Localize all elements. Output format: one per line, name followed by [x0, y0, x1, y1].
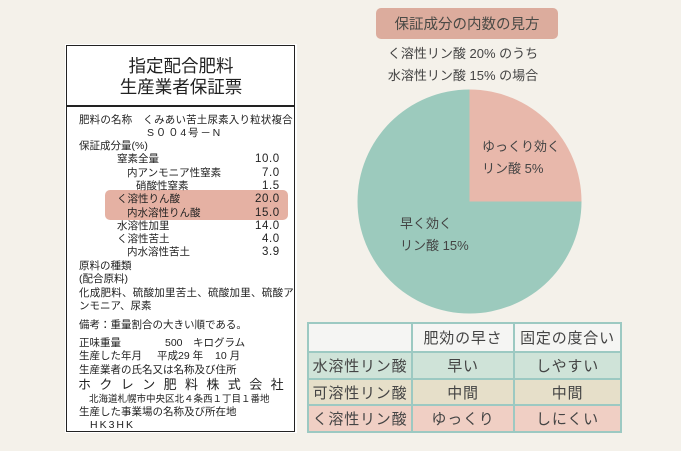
- pie label: fast-acting: リン酸 15%: [400, 238, 469, 253]
- certificate heading: 指定配合肥料: [128, 56, 234, 76]
- certificate text: 窒素全量: [117, 152, 159, 164]
- certificate text: 生産した年月: [79, 350, 142, 362]
- certificate text: 15.0: [255, 206, 280, 218]
- subtitle text: 水溶性リン酸 15% の場合: [388, 68, 538, 82]
- certificate text: 14.0: [255, 220, 280, 232]
- certificate text: [78, 114, 294, 430]
- table row: citric soluble: ゆっくり: [431, 411, 495, 428]
- table header row: [309, 324, 620, 351]
- table header row: 肥効の早さ: [423, 330, 502, 347]
- certificate text: (配合原料): [79, 272, 128, 284]
- table row: available: 中間: [447, 384, 479, 402]
- certificate text: 備考：重量割合の大きい順である。: [79, 318, 247, 330]
- table row: water soluble: しやすい: [536, 358, 599, 375]
- table row: citric soluble: しにくい: [536, 411, 599, 428]
- certificate frame: [66, 45, 295, 432]
- table row: water soluble: 水溶性リン酸: [313, 358, 407, 375]
- table row: available: [309, 380, 620, 404]
- certificate text: 7.0: [262, 166, 280, 178]
- certificate heading: 生産業者保証票: [120, 77, 242, 97]
- certificate heading: [120, 56, 242, 97]
- table row: available: 中間: [552, 384, 583, 402]
- certificate text: 水溶性加里: [117, 220, 170, 232]
- certificate text: 肥料の名称 くみあい苦土尿素入り粒状複合: [79, 114, 293, 126]
- certificate text: ホクレン肥料株式会社: [78, 376, 292, 392]
- certificate text: 内水溶性苦土: [127, 246, 190, 258]
- slice: fast-acting phosphate 15%: [358, 89, 582, 313]
- certificate text: く溶性苦土: [117, 232, 170, 244]
- certificate text: 原料の種類: [79, 260, 132, 272]
- pie label: fast-acting: 早く効く: [400, 216, 452, 231]
- pie label: slow-acting: リン酸 5%: [482, 161, 543, 176]
- table row: citric soluble: [309, 406, 620, 431]
- slice: slow-acting phosphate 5%: [470, 90, 582, 202]
- heading pill: [376, 8, 558, 39]
- certificate text: 10.0: [255, 152, 280, 164]
- certificate text: S００4号－N: [147, 126, 222, 138]
- certificate text: HK3HK: [90, 418, 135, 430]
- certificate text: 正味重量: [79, 336, 121, 348]
- subtitle text: [388, 46, 538, 82]
- table row: available: 可溶性リン酸: [313, 384, 407, 402]
- table row: water soluble: 早い: [447, 358, 479, 375]
- highlight: citric soluble phosphate rows: [105, 190, 288, 220]
- certificate text: 20.0: [255, 192, 280, 204]
- pie label: slow-acting: [482, 139, 560, 176]
- certificate text: 生産した事業場の名称及び所在地: [79, 406, 236, 418]
- certificate text: 3.9: [262, 246, 280, 258]
- heading pill: 保証成分の内数の見方: [394, 17, 540, 33]
- certificate text: 生産業者の氏名又は名称及び住所: [79, 364, 236, 376]
- certificate text: 保証成分量(%): [79, 140, 148, 152]
- comparison table: [307, 322, 622, 433]
- certificate text: キログラム: [193, 336, 245, 348]
- certificate text: 硝酸性窒素: [136, 180, 188, 192]
- certificate text: 内水溶性りん酸: [127, 206, 200, 218]
- certificate text: 500: [165, 336, 183, 348]
- certificate text: ンモニア、尿素: [79, 300, 151, 312]
- table row: water soluble: [309, 353, 620, 378]
- certificate text: 10 月: [215, 350, 240, 362]
- certificate text: 北海道札幌市中央区北４条西１丁目１番地: [89, 394, 270, 404]
- subtitle text: く溶性リン酸 20% のうち: [388, 46, 538, 61]
- certificate text: 化成肥料、硫酸加里苦土、硫酸加里、硫酸ア: [79, 286, 294, 298]
- certificate text: 内アンモニア性窒素: [127, 166, 221, 178]
- certificate text: 4.0: [262, 232, 280, 244]
- table header row: 固定の度合い: [520, 330, 615, 347]
- table row: citric soluble: く溶性リン酸: [313, 411, 407, 428]
- certificate text: 1.5: [262, 180, 280, 192]
- pie label: slow-acting: ゆっくり効く: [482, 139, 560, 154]
- certificate text: 平成29 年: [157, 350, 203, 362]
- pie chart: [358, 90, 582, 314]
- certificate text: く溶性りん酸: [117, 192, 180, 204]
- pie label: fast-acting: [400, 216, 469, 253]
- panel: fertilizer guarantee certificate: [65, 44, 297, 433]
